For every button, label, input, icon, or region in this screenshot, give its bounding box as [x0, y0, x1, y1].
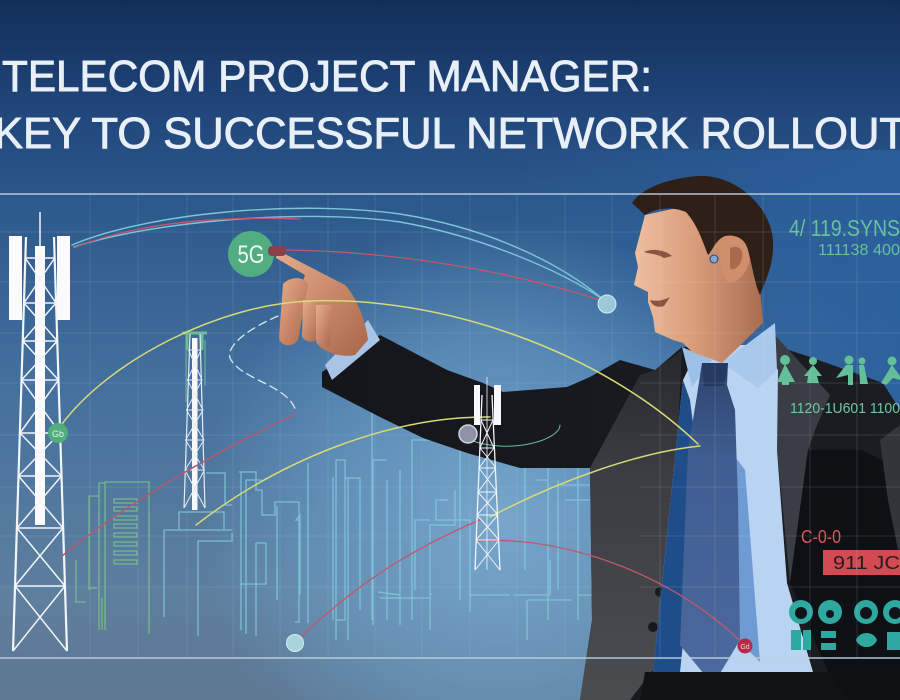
- man: belt: [640, 672, 850, 700]
- node: red: Gd: [740, 644, 750, 651]
- node: green: Gb: [52, 429, 64, 439]
- people icons: [777, 355, 900, 385]
- title: [0, 52, 900, 158]
- network nodes: [48, 246, 752, 654]
- data readout: top right: 111138 400: [818, 242, 900, 259]
- yellow arcs: [62, 301, 700, 525]
- 5G badge: 5G: [238, 241, 264, 269]
- man: hand: [276, 250, 368, 356]
- node: red: [738, 638, 752, 654]
- dashed route: [230, 316, 296, 412]
- node: bottom: [286, 634, 304, 652]
- title: KEY TO SUCCESSFUL NETWORK ROLLOUT: [0, 109, 900, 158]
- man: hair: [632, 176, 773, 295]
- cyan skyline: [164, 408, 660, 640]
- tower: center: [474, 377, 501, 570]
- man: shirt cuff: [325, 320, 380, 380]
- red signal arcs: [62, 218, 742, 643]
- node: green: [48, 423, 68, 443]
- red status box: 911 JC: [833, 553, 900, 573]
- man: suit jacket, sleeve and pointing arm: [322, 333, 900, 700]
- blue signal arcs: [72, 208, 606, 302]
- teal icons: [789, 600, 900, 650]
- node: tower center: [459, 425, 477, 443]
- man: head and ear: [634, 205, 763, 363]
- 5G badge: [228, 231, 274, 277]
- green building: [76, 482, 149, 634]
- title: TELECOM PROJECT MANAGER:: [2, 52, 652, 101]
- red status box: [823, 550, 900, 575]
- green arc: [470, 425, 560, 446]
- frame lines: [0, 194, 900, 658]
- man: shirt, collar and tie: [653, 323, 813, 685]
- tower: small middle: [182, 333, 207, 510]
- network arcs: [62, 208, 742, 643]
- tower: large left: [9, 212, 70, 651]
- data readout: top right: [789, 215, 900, 259]
- node: upper right: [598, 295, 616, 313]
- city skyline outlines: [76, 408, 660, 640]
- red status label: C-0-0: [801, 527, 841, 547]
- node: finger tip: [268, 246, 286, 256]
